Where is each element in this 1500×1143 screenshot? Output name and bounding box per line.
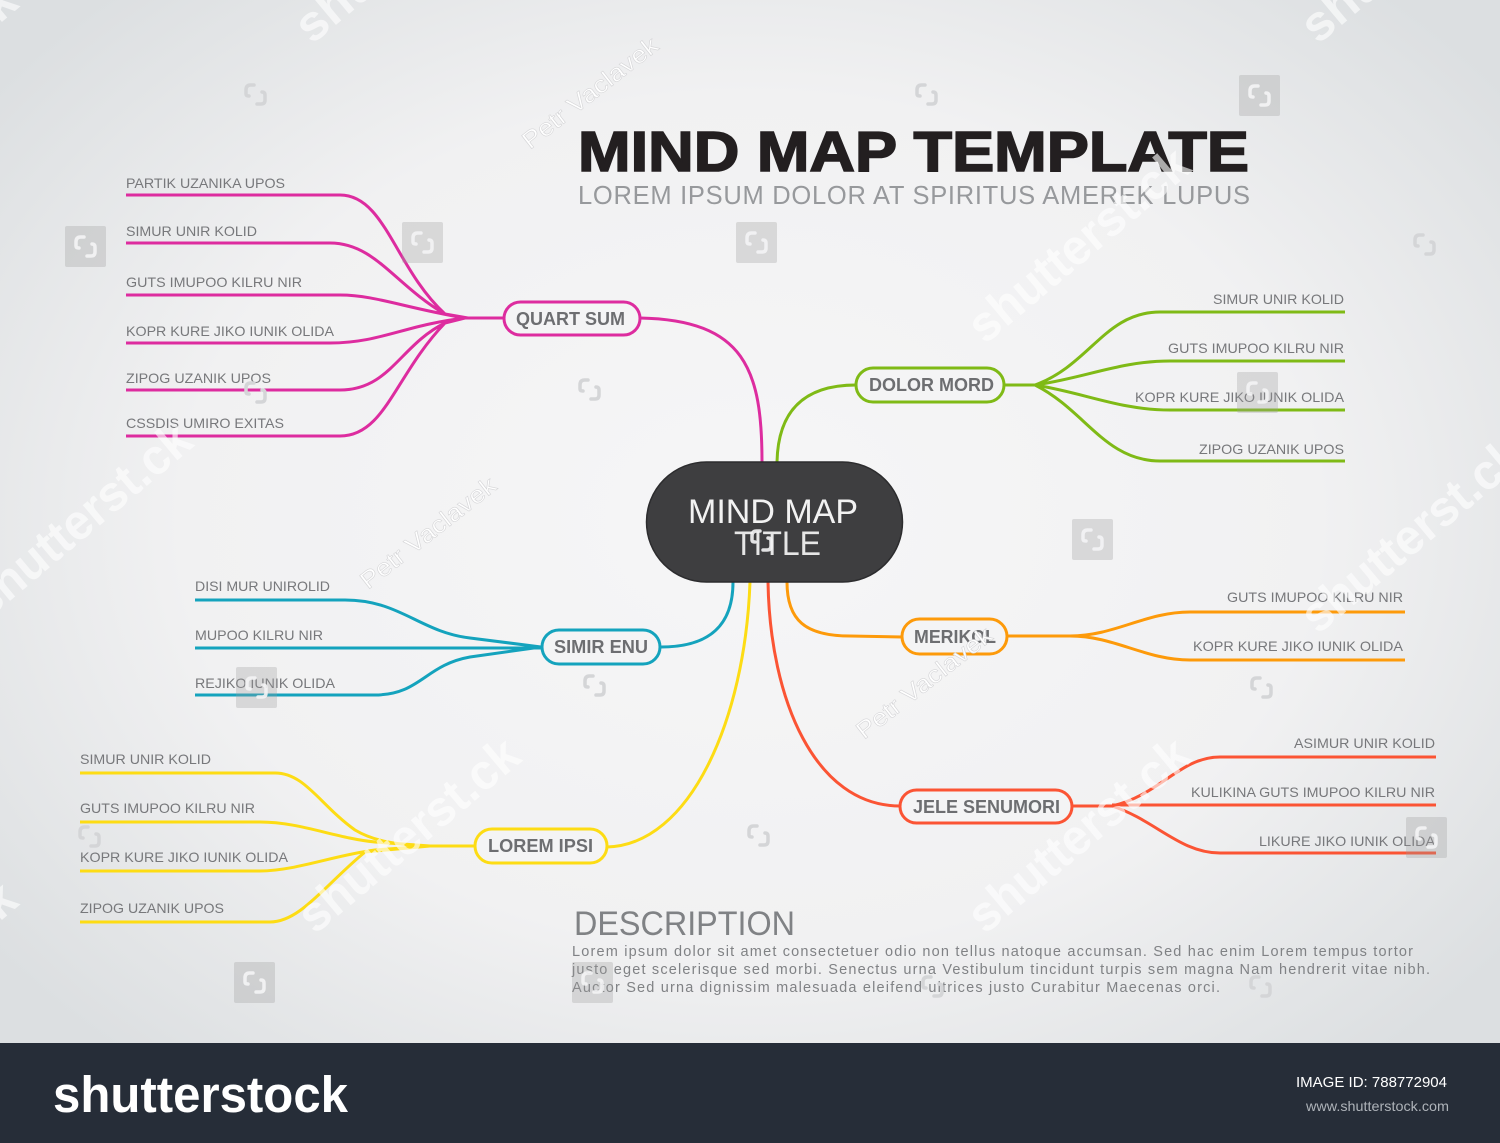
- node: quart sum: QUART SUM: [516, 309, 625, 329]
- labels: lorem ipsi: GUTS IMUPOO KILRU NIR: [80, 800, 255, 816]
- text: shutterst.ck: [956, 136, 1201, 353]
- labels: quart sum: KOPR KURE JIKO IUNIK OLIDA: [126, 323, 335, 339]
- description: justo eget scelerisque sed morbi. Senectus urna Vestibulum tincidunt turpis sem magna Nam hendrerit vitae nibh.: [571, 962, 1430, 978]
- labels: quart sum: PARTIK UZANIKA UPOS: [126, 175, 285, 191]
- labels: jele senumori: KULIKINA GUTS IMUPOO KILRU NIR: [1191, 784, 1435, 800]
- description: [571, 905, 1430, 996]
- title: MIND MAP TEMPLATE: [578, 120, 1249, 184]
- node: dolor mord: [856, 368, 1004, 402]
- labels: simir enu: DISI MUR UNIROLID: [195, 578, 330, 594]
- node: jele senumori: JELE SENUMORI: [913, 797, 1060, 817]
- text: Petr Vaclavek: [851, 621, 999, 745]
- labels: merikol: GUTS IMUPOO KILRU NIR: [1227, 589, 1403, 605]
- node: lorem ipsi: LOREM IPSI: [488, 836, 593, 856]
- text: shutterst.ck: [956, 726, 1201, 943]
- node: merikol: MERIKOL: [914, 627, 996, 647]
- website: www.shutterstock.com: [1305, 1098, 1449, 1114]
- labels: merikol: KOPR KURE JIKO IUNIK OLIDA: [1193, 638, 1404, 654]
- labels: jele senumori: ASIMUR UNIR KOLID: [1294, 735, 1435, 751]
- labels: lorem ipsi: [80, 751, 289, 916]
- labels: quart sum: CSSDIS UMIRO EXITAS: [126, 415, 284, 431]
- description: Lorem ipsum dolor sit amet consectetuer odio non tellus natoque accumsan. Sed hac enim Lorem tempus tortor: [572, 944, 1413, 960]
- node: simir enu: [542, 630, 660, 664]
- description: Auctor Sed urna dignissim malesuada eleifend ultrices justo Curabitur Maecenas orci.: [572, 980, 1220, 996]
- labels: lorem ipsi: SIMUR UNIR KOLID: [80, 751, 211, 767]
- branch: dolor mord: [777, 291, 1345, 462]
- branch: merikol: [787, 582, 1405, 660]
- labels: dolor mord: GUTS IMUPOO KILRU NIR: [1168, 340, 1344, 356]
- branch: jele senumori: [768, 582, 1436, 853]
- node: simir enu: SIMIR ENU: [554, 637, 648, 657]
- description: DESCRIPTION: [574, 905, 795, 943]
- node: dolor mord: DOLOR MORD: [869, 375, 994, 395]
- labels: quart sum: ZIPOG UZANIK UPOS: [126, 370, 271, 386]
- footer bar: [0, 1043, 1500, 1143]
- labels: dolor mord: KOPR KURE JIKO IUNIK OLIDA: [1135, 389, 1345, 405]
- branch: simir enu: [195, 578, 733, 695]
- labels: quart sum: GUTS IMUPOO KILRU NIR: [126, 274, 302, 290]
- labels: dolor mord: ZIPOG UZANIK UPOS: [1199, 441, 1344, 457]
- labels: quart sum: SIMUR UNIR KOLID: [126, 223, 257, 239]
- subtitle: LOREM IPSUM DOLOR AT SPIRITUS AMEREK LUPUS: [578, 182, 1250, 210]
- labels: quart sum: [126, 175, 335, 431]
- node: merikol: [902, 619, 1007, 654]
- node: quart sum: [504, 302, 640, 335]
- labels: dolor mord: SIMUR UNIR KOLID: [1213, 291, 1344, 307]
- footer logo: shutterstock: [53, 1066, 349, 1123]
- node: lorem ipsi: [475, 829, 607, 863]
- branch: quart sum: [126, 175, 762, 462]
- central node: [646, 462, 902, 582]
- branch: lorem ipsi: [80, 582, 750, 922]
- central node: TITLE: [734, 525, 821, 563]
- labels: dolor mord: [1135, 291, 1345, 457]
- labels: jele senumori: [1191, 735, 1436, 849]
- labels: simir enu: REJIKO IUNIK OLIDA: [195, 675, 336, 691]
- labels: lorem ipsi: ZIPOG UZANIK UPOS: [80, 900, 224, 916]
- central node: MIND MAP: [688, 493, 858, 531]
- text: shutterst.ck: [286, 726, 531, 943]
- labels: merikol: [1193, 589, 1404, 654]
- labels: lorem ipsi: KOPR KURE JIKO IUNIK OLIDA: [80, 849, 289, 865]
- text: Petr Vaclavek: [355, 471, 503, 595]
- labels: simir enu: [195, 578, 336, 691]
- labels: jele senumori: LIKURE JIKO IUNIK OLIDA: [1259, 833, 1436, 849]
- node: jele senumori: [900, 790, 1072, 823]
- image id: IMAGE ID: 788772904: [1296, 1074, 1447, 1091]
- labels: simir enu: MUPOO KILRU NIR: [195, 627, 323, 643]
- text: Petr Vaclavek: [517, 31, 665, 155]
